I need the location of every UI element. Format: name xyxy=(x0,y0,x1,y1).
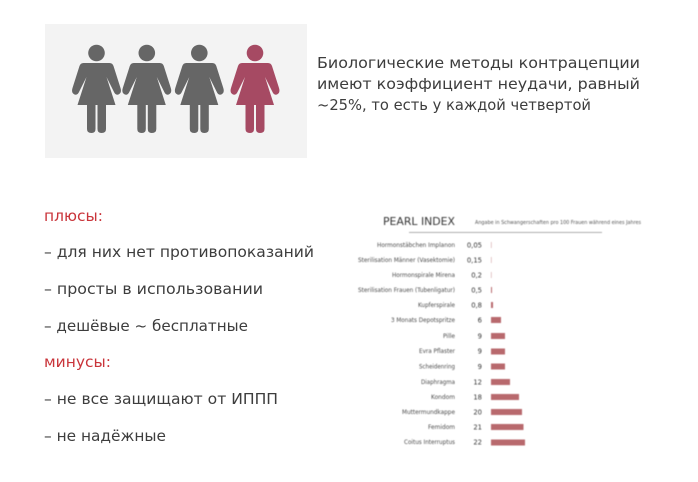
row: Hormonstäbchen Implanon xyxy=(377,242,492,250)
row: Femidom: 21 xyxy=(473,424,482,432)
row: Evra Pflaster xyxy=(419,348,505,356)
row: Sterilisation Männer xyxy=(358,256,492,264)
row: Hormonspirale Mirena: 0,2 xyxy=(471,272,482,280)
icon: woman 1 of 4, grey xyxy=(72,45,121,133)
row: Kondom: Kondom xyxy=(431,394,455,401)
list: cons: – не надёжные xyxy=(44,427,166,445)
row: Sterilisation Frauen: Sterilisation Frauen (Tubenligatur) xyxy=(358,287,455,294)
icon: woman 4 of 4, highlighted xyxy=(231,45,279,133)
list: pros: – просты в использовании xyxy=(44,280,263,298)
heading: pros: плюсы: xyxy=(44,207,103,225)
row: Femidom xyxy=(428,424,524,432)
heading: cons: минусы: xyxy=(44,353,111,371)
row: Coitus Interruptus xyxy=(404,438,525,446)
row: Diaphragma: 12 xyxy=(473,378,482,386)
list: cons xyxy=(44,390,278,445)
panel: figures background xyxy=(45,24,307,158)
row: Hormonspirale Mirena: Hormonspirale Mirena xyxy=(392,272,455,279)
row: Hormonstäbchen Implanon: Hormonstäbchen Implanon xyxy=(377,242,455,249)
row: Femidom: Femidom xyxy=(428,424,455,431)
list: cons: – не все защищают от ИППП xyxy=(44,390,278,408)
row: Evra Pflaster: Evra Pflaster xyxy=(419,348,455,355)
icon: woman 3 of 4, grey xyxy=(175,45,224,133)
row: 3 Monats Depotspritze xyxy=(391,316,501,324)
row: 3 Monats Depotspritze: 3 Monats Depotspritze xyxy=(391,317,455,324)
list: pros: – для них нет противопоказаний xyxy=(44,243,314,261)
text block: failure rate xyxy=(317,54,640,114)
row: Pille: Pille xyxy=(443,333,455,340)
row: Evra Pflaster: 9 xyxy=(478,348,482,356)
row: Kupferspirale: 0,8 xyxy=(471,302,482,310)
text block: failure rate: ~25%, то есть у каждой четвертой xyxy=(317,96,591,114)
row: Muttermundkappe xyxy=(402,408,522,416)
row: 3 Monats Depotspritze: 6 xyxy=(478,316,482,324)
row: Muttermundkappe: Muttermundkappe xyxy=(402,409,455,416)
row: Kondom: 18 xyxy=(473,394,482,402)
list: pros xyxy=(44,243,314,335)
row: Hormonstäbchen Implanon: 0,05 xyxy=(467,242,482,250)
row: Kupferspirale xyxy=(418,302,493,310)
row: Coitus Interruptus: Coitus Interruptus xyxy=(404,439,455,446)
row: Sterilisation Frauen xyxy=(358,286,492,294)
icon: woman 2 of 4, grey xyxy=(122,45,171,133)
row: Sterilisation Männer: 0,15 xyxy=(467,256,482,264)
text block: failure rate: имеют коэффициент неудачи, равный xyxy=(317,75,640,93)
row: Scheidenring: Scheidenring xyxy=(419,364,455,370)
row: Pille: 9 xyxy=(478,332,482,340)
chart subtitle: Angabe in Schwangerschaften pro 100 Frauen während eines Jahres xyxy=(475,220,641,226)
row: Diaphragma xyxy=(421,378,510,386)
chart title: PEARL INDEX xyxy=(383,215,455,228)
row: Kupferspirale: Kupferspirale xyxy=(418,302,455,309)
row: Sterilisation Männer: Sterilisation Männer (Vasektomie) xyxy=(358,257,455,264)
row: Coitus Interruptus: 22 xyxy=(473,438,482,446)
row: Kondom xyxy=(431,394,519,402)
row: Pille xyxy=(443,332,505,340)
text block: failure rate: Биологические методы контрацепции xyxy=(317,54,640,72)
row: Hormonspirale Mirena xyxy=(392,272,492,280)
row: Muttermundkappe: 20 xyxy=(473,408,482,416)
row: Sterilisation Frauen: 0,5 xyxy=(471,286,482,294)
row: Scheidenring xyxy=(419,363,505,371)
row: Scheidenring: 9 xyxy=(478,363,482,371)
row: Diaphragma: Diaphragma xyxy=(421,379,455,386)
list: pros: – дешёвые ~ бесплатные xyxy=(44,317,248,335)
chart: Pearl Index xyxy=(358,215,641,446)
